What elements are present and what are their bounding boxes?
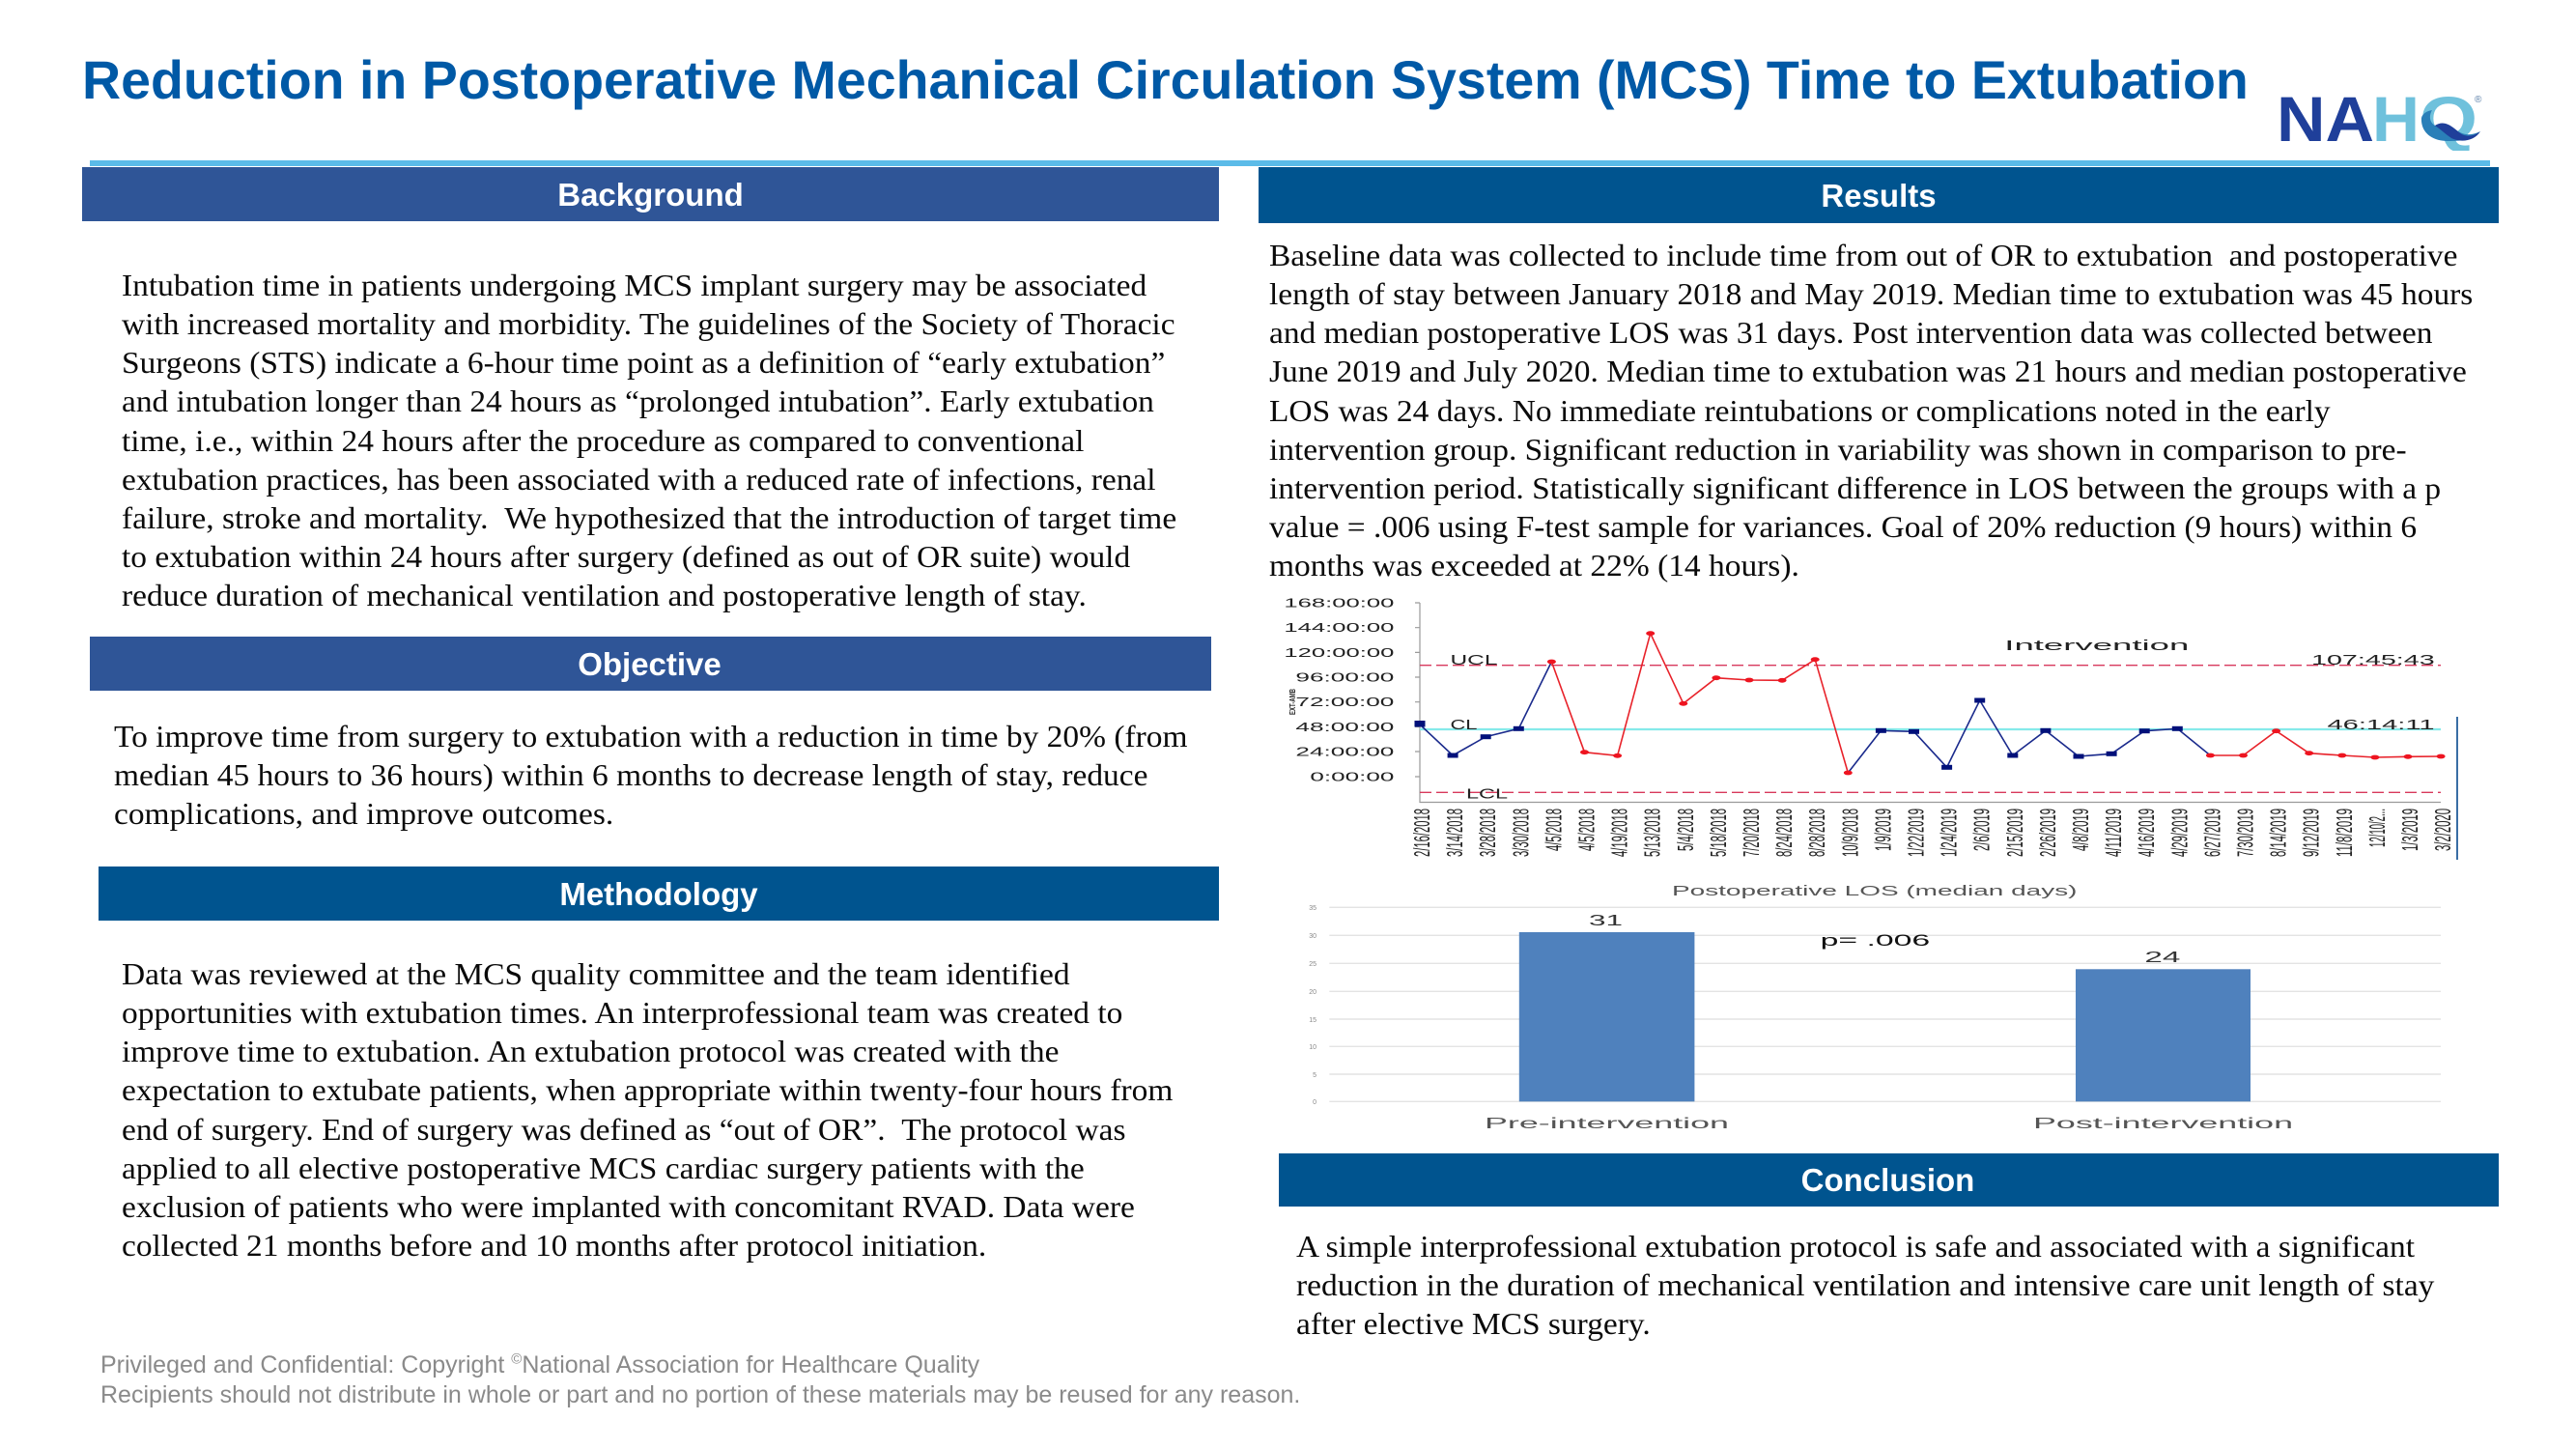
text: results: LOS was 24 days. No immediate reintubations or complications noted in the early (1269, 393, 2331, 428)
control chart: time to extubation: 8/14/2019 (2266, 809, 2291, 857)
panel: methodology (99, 867, 1219, 1263)
x-axis date labels (1409, 809, 2455, 857)
control chart: time to extubation: 5/18/2018 (1706, 809, 1731, 857)
y-axis labels: 10 (1309, 1044, 1316, 1051)
bar: post-intervention: 24 (2144, 950, 2181, 966)
control chart: time to extubation: 1/9/2019 (1870, 809, 1895, 851)
heading: background (82, 167, 1219, 221)
panel: background (82, 167, 1219, 612)
text: background: and intubation longer than 24 hours as “prolonged intubation”. Early extubation (122, 384, 1154, 418)
text: results: Baseline data was collected to include time from out of OR to extubation and postoperative (1269, 238, 2457, 272)
divider rule (90, 160, 2490, 166)
heading: results (1259, 167, 2499, 223)
bar chart: postoperative LOS (1309, 883, 2441, 1132)
y-axis labels: 0:00:00 (1310, 769, 1394, 784)
text: methodology: applied to all elective postoperative MCS cardiac surgery patients with the (122, 1151, 1085, 1185)
text: objective: median 45 hours to 36 hours) within 6 months to decrease length of stay, reduce (114, 757, 1147, 792)
text: background (122, 268, 1176, 612)
text: results (1269, 238, 2473, 582)
control chart: time to extubation: 4/5/2018 (1574, 809, 1599, 851)
control chart: time to extubation: 2/6/2019 (1969, 809, 1995, 851)
y-axis labels: 30 (1309, 933, 1316, 940)
limit labels: CL (1451, 717, 1478, 733)
control chart: time to extubation: 3/2/2020 (2430, 809, 2455, 851)
logo: NAHQ (2277, 87, 2482, 151)
heading: conclusion: Conclusion (1801, 1161, 1974, 1198)
panel: objective (90, 637, 1211, 831)
limit labels (1451, 638, 2435, 802)
panel: results (1259, 167, 2499, 582)
text: conclusion: reduction in the duration of mechanical ventilation and intensive care unit length of stay (1296, 1267, 2434, 1302)
control chart: time to extubation: 3/30/2018 (1508, 809, 1533, 857)
text: results: length of stay between January 2018 and May 2019. Median time to extubation was 45 hours (1269, 276, 2473, 311)
y-axis labels: 168:00:00 (1284, 595, 1394, 611)
control chart: time to extubation: 3/28/2018 (1475, 809, 1500, 857)
control chart: time to extubation (1284, 595, 2458, 860)
control chart: time to extubation: 8/28/2018 (1804, 809, 1829, 857)
title: Reduction in Postoperative Mechanical Circulation System (MCS) Time to Extubation (82, 50, 2249, 110)
y-axis labels: 25 (1309, 961, 1316, 968)
logo: NAHQ: ® (2475, 95, 2482, 105)
y-axis title: EXT-AMB (1288, 689, 1297, 715)
y-axis labels: 120:00:00 (1284, 645, 1394, 660)
heading: objective: Objective (578, 646, 722, 682)
text: objective: To improve time from surgery to extubation with a reduction in time by 20% (from (114, 719, 1187, 753)
y-axis labels: 35 (1309, 905, 1316, 912)
axes (1415, 603, 2441, 802)
text: methodology: exclusion of patients who were implanted with concomitant RVAD. Data were (122, 1189, 1135, 1224)
data markers: in control (1414, 697, 2183, 770)
intervention boundary line (2456, 717, 2458, 860)
y-axis labels: 20 (1309, 989, 1316, 996)
text: results: June 2019 and July 2020. Median time to extubation was 21 hours and median postoperative (1269, 354, 2467, 388)
control limit lines (1420, 666, 2441, 792)
control chart: time to extubation: 7/20/2018 (1739, 809, 1764, 857)
data line (1420, 634, 2441, 773)
text: background: time, i.e., within 24 hours after the procedure as compared to conventional (122, 423, 1084, 458)
limit labels: LCL (1466, 786, 1508, 802)
text: methodology: expectation to extubate patients, when appropriate within twenty-four hours from (122, 1072, 1173, 1107)
text: background: reduce duration of mechanical ventilation and postoperative length of stay. (122, 578, 1087, 612)
text: results: intervention group. Significant reduction in variability was shown in comparison to pre- (1269, 432, 2407, 467)
control chart: time to extubation: 2/26/2019 (2035, 809, 2060, 857)
control chart: time to extubation: 12/10/2... (2364, 809, 2390, 847)
text: methodology: improve time to extubation. An extubation protocol was created with the (122, 1034, 1059, 1068)
y-axis labels (1284, 595, 1394, 784)
bar: post-intervention: Post-intervention (2033, 1116, 2293, 1132)
control chart: time to extubation: 5/13/2018 (1640, 809, 1665, 857)
control chart: time to extubation: 4/11/2019 (2101, 809, 2126, 857)
chart title: Postoperative LOS (median days) (1672, 883, 2077, 899)
control chart: time to extubation: 1/3/2019 (2397, 809, 2422, 851)
y-axis labels: 72:00:00 (1295, 695, 1394, 709)
control chart: time to extubation: 9/12/2019 (2299, 809, 2324, 857)
control chart: time to extubation: 6/27/2019 (2199, 809, 2224, 857)
panel: conclusion (1279, 1153, 2499, 1341)
text: methodology: Data was reviewed at the MCS quality committee and the team identified (122, 956, 1070, 991)
text: methodology: collected 21 months before and 10 months after protocol initiation. (122, 1228, 986, 1263)
text: objective (114, 719, 1187, 831)
footer: confidentiality notice (100, 1351, 1300, 1408)
text: background: Surgeons (STS) indicate a 6-hour time point as a definition of “early extubation” (122, 345, 1165, 380)
control chart: time to extubation: 4/16/2019 (2134, 809, 2159, 857)
text: background: extubation practices, has been associated with a reduced rate of infections, renal (122, 462, 1156, 497)
text: results: and median postoperative LOS was 31 days. Post intervention data was collected between (1269, 315, 2432, 350)
p value: p= .006 (1821, 931, 1930, 950)
control chart: time to extubation: 5/4/2018 (1673, 809, 1698, 851)
control chart: time to extubation: 2/15/2019 (2002, 809, 2027, 857)
control chart: time to extubation: 3/14/2018 (1442, 809, 1467, 857)
heading: methodology: Methodology (559, 876, 758, 912)
control chart: time to extubation: 7/30/2019 (2233, 809, 2258, 857)
footer: confidentiality notice: Privileged and Confidential: Copyright ©National Association for Healthcare Quality (100, 1351, 979, 1378)
y-axis labels: 5 (1313, 1072, 1316, 1079)
limit labels: Intervention (2004, 638, 2189, 654)
y-axis labels: 24:00:00 (1295, 745, 1394, 759)
text: methodology: end of surgery. End of surgery was defined as “out of OR”. The protocol was (122, 1112, 1125, 1147)
bar: pre-intervention: 31 (1589, 913, 1623, 929)
bar: pre-intervention (1485, 913, 1729, 1132)
text: results: months was exceeded at 22% (14 hours). (1269, 548, 1799, 582)
y-axis labels: 96:00:00 (1295, 670, 1394, 684)
control chart: time to extubation: 4/8/2019 (2068, 809, 2093, 851)
text: conclusion (1296, 1229, 2434, 1341)
text: conclusion: after elective MCS surgery. (1296, 1306, 1651, 1341)
text: background: failure, stroke and mortality. We hypothesized that the introduction of target time (122, 500, 1176, 535)
text: objective: complications, and improve outcomes. (114, 796, 613, 831)
text: conclusion: A simple interprofessional extubation protocol is safe and associated with a significant (1296, 1229, 2415, 1264)
heading: methodology (99, 867, 1219, 921)
heading: conclusion (1279, 1153, 2499, 1207)
control chart: time to extubation: 2/16/2018 (1409, 809, 1434, 857)
y-axis labels: 15 (1309, 1017, 1316, 1024)
text: results: intervention period. Statistically significant difference in LOS between the groups with a p (1269, 470, 2441, 505)
limit labels: 46:14:11 (2328, 717, 2434, 733)
text: background: Intubation time in patients undergoing MCS implant surgery may be associated (122, 268, 1146, 302)
bar: pre-intervention: Pre-intervention (1485, 1116, 1729, 1132)
control chart: time to extubation: 4/19/2018 (1607, 809, 1632, 857)
y-axis labels: 0 (1313, 1099, 1316, 1106)
text: methodology (122, 956, 1173, 1263)
text: background: to extubation within 24 hours after surgery (defined as out of OR suite) would (122, 539, 1130, 574)
control chart: time to extubation: 4/29/2019 (2166, 809, 2192, 857)
text: methodology: opportunities with extubation times. An interprofessional team was created to (122, 995, 1122, 1030)
text: results: value = .006 using F-test sample for variances. Goal of 20% reduction (9 hours) within 6 (1269, 509, 2417, 544)
control chart: time to extubation: 1/22/2019 (1903, 809, 1928, 857)
y-axis labels: 48:00:00 (1295, 720, 1394, 734)
text: background: with increased mortality and morbidity. The guidelines of the Society of Thoracic (122, 306, 1175, 341)
control chart: time to extubation: 1/24/2019 (1937, 809, 1962, 857)
control chart: time to extubation: 8/24/2018 (1771, 809, 1797, 857)
y-axis labels (1309, 905, 1316, 1106)
data markers: special cause (1547, 631, 2446, 775)
y-axis labels: 144:00:00 (1284, 620, 1394, 635)
bar: post-intervention (2033, 950, 2293, 1132)
limit labels: UCL (1451, 652, 1497, 668)
control chart: time to extubation: 11/8/2019 (2332, 809, 2357, 857)
heading: objective (90, 637, 1211, 691)
heading: results: Results (1821, 178, 1937, 213)
heading: background: Background (557, 177, 744, 213)
limit labels: 107:45:43 (2311, 652, 2435, 668)
footer: confidentiality notice: Recipients should not distribute in whole or part and no portion of these materials may be reused for any reason. (100, 1381, 1300, 1408)
control chart: time to extubation: 4/5/2018 (1541, 809, 1566, 851)
control chart: time to extubation: 10/9/2018 (1837, 809, 1862, 857)
